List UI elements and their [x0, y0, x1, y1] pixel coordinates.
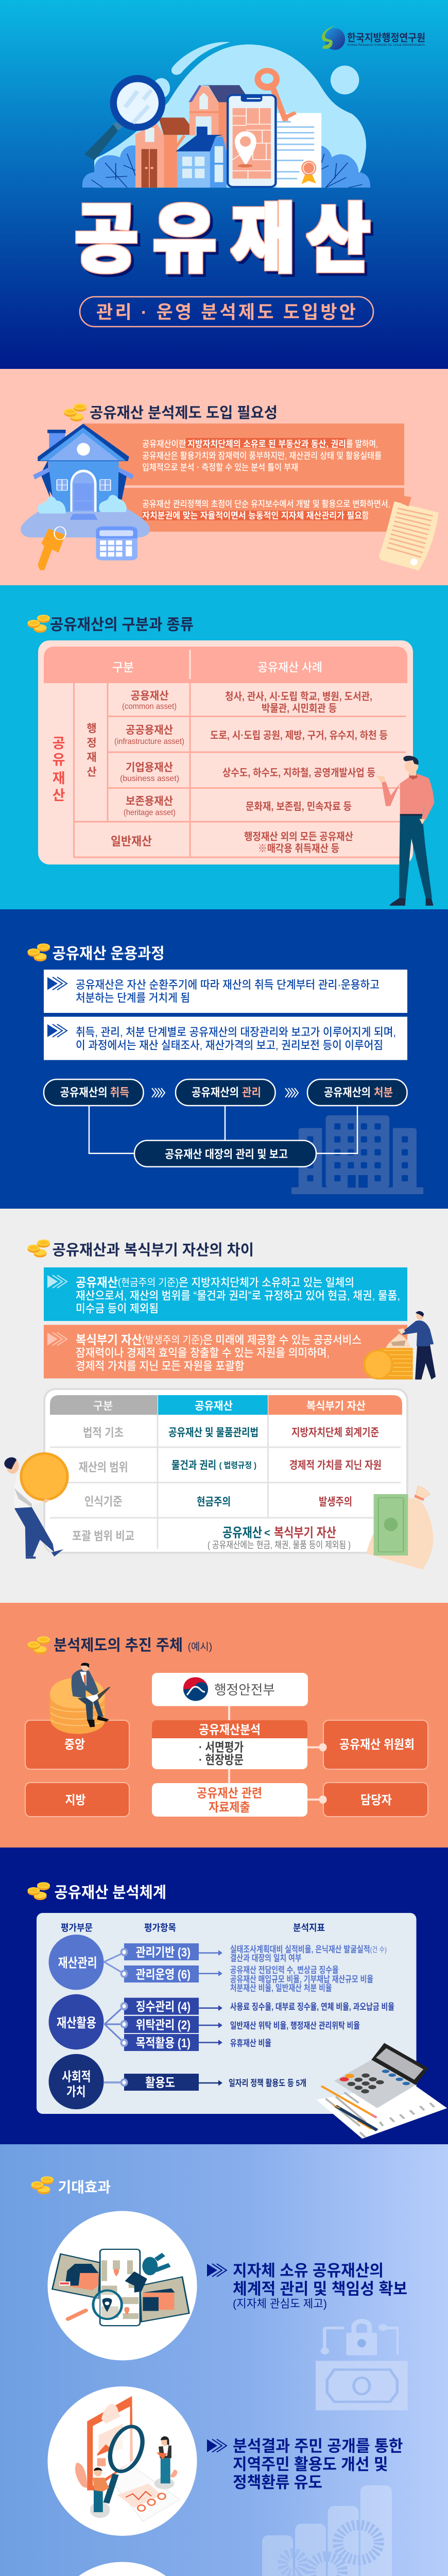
- illustration: money sack and cash: [366, 1486, 434, 1570]
- category circles: 사회적: [62, 2070, 91, 2084]
- box: ministry: 행정안전부: [214, 1682, 275, 1698]
- row examples: [210, 690, 388, 854]
- table header: [93, 1400, 366, 1412]
- evaluation item boxes: 목적활용 (1): [136, 2036, 191, 2050]
- circle: analysis report illustration: [47, 2386, 197, 2536]
- column: double-entry: 발생주의: [319, 1496, 352, 1508]
- text: effect 2: [207, 2437, 403, 2492]
- text panel 1: 를 말하며,: [346, 439, 378, 449]
- row examples: 문화재, 보존림, 민속자료 등: [246, 801, 352, 812]
- step: disposal: 처분: [374, 1086, 393, 1099]
- step: disposal: [307, 1079, 407, 1106]
- vertical label: public property: [53, 736, 65, 803]
- analysis indicators: 공유재산 전담인력 수, 변상금 징수율: [230, 1965, 339, 1975]
- text panel 2: [83, 488, 404, 532]
- column: double-entry: 지방자치단체 회계기준: [291, 1427, 379, 1438]
- title: 공유재산: [74, 177, 371, 287]
- analysis indicators: 공유재산 매입규모 비율, 기부채납 재산규모 비율: [230, 1974, 373, 1985]
- blue definition box: 재산으로서, 재산의 범위를 “물건과 권리”로 규정하고 있어 현금, 채권, 물품,: [76, 1289, 400, 1302]
- comparison summary: [208, 1526, 351, 1550]
- column: category: 포괄 범위 비교: [72, 1529, 134, 1543]
- icon: taegeuk: [183, 1677, 208, 1701]
- row labels: 기업용재산: [126, 761, 173, 774]
- panel: actors of the analysis system: [0, 1603, 448, 1848]
- column headers: 분석지표: [293, 1923, 325, 1933]
- analysis indicators: 사용료 징수율, 대부료 징수율, 연체 비율, 과오납금 비율: [230, 2002, 394, 2012]
- row labels: 일반재산: [111, 835, 152, 848]
- circle: expert team illustration: [47, 2562, 197, 2576]
- row labels: 공공용재산: [126, 724, 173, 736]
- analysis indicators: 처분재산 비율, 일반재산 처분 비율: [230, 1984, 332, 1993]
- box: central: [25, 1720, 129, 1769]
- comparison summary: <: [264, 1528, 270, 1539]
- table header: [112, 660, 322, 674]
- analysis indicators: 일반재산 위탁 비율, 행정재산 관리위탁 비율: [230, 2021, 360, 2031]
- row examples: 박물관, 시민회관 등: [262, 703, 337, 714]
- logo: institute: Korea Research Institute for Local Administration: [348, 43, 425, 47]
- box: data submission: 공유재산 관련: [197, 1787, 262, 1800]
- column: category: [72, 1426, 134, 1543]
- illustration: houses, phone map, key and document: [82, 42, 370, 188]
- row labels: 보존용재산: [126, 795, 173, 807]
- heading: (예시): [188, 1641, 212, 1653]
- category circles: 재산관리: [58, 1956, 97, 1970]
- text: effect 2: 지역주민 활용도 개선 및: [233, 2455, 388, 2473]
- text box 2: [44, 1017, 407, 1060]
- vertical label: administrative property: [87, 723, 97, 778]
- box: data submission: [152, 1783, 307, 1817]
- heading: 공유재산 운용과정: [53, 945, 165, 962]
- analysis indicators: (건 수): [370, 1945, 387, 1954]
- panel: hero cover: [0, 0, 448, 369]
- text panel 1: 공유재산은 활용가치와 잠재력이 풍부하지만, 재산관리 상태 및 활용실태를: [142, 451, 382, 461]
- orange definition box: 복식부기 자산: [76, 1333, 142, 1347]
- step: management: [176, 1079, 275, 1106]
- illustration: faded buildings: [291, 1115, 423, 1194]
- table header: 구분: [93, 1400, 113, 1412]
- step: management: 공유재산의: [192, 1086, 239, 1099]
- row examples: 상수도, 하수도, 지하철, 공영개발사업 등: [222, 767, 375, 779]
- vertical label: public property: 산: [53, 788, 65, 803]
- column: public property: 물건과 권리: [171, 1460, 216, 1471]
- analysis indicators: 결산과 대장의 일치 여부: [230, 1954, 302, 1963]
- heading: 공유재산과 복식부기 자산의 차이: [53, 1242, 254, 1259]
- category circles: [48, 1935, 104, 2109]
- illustration: man with coins and sack: [363, 1311, 436, 1380]
- vertical label: administrative property: 정: [87, 737, 97, 749]
- vertical label: public property: 재: [53, 771, 65, 786]
- blue definition box: 미수금 등이 제외됨: [76, 1302, 159, 1315]
- heading: 공유재산 분석체계: [55, 1885, 166, 1901]
- orange definition box: [44, 1325, 407, 1379]
- box: data submission: 자료제출: [209, 1801, 250, 1815]
- box: property analysis: · 서면평가: [199, 1740, 244, 1755]
- text panel 1: [83, 423, 404, 485]
- column: double-entry: [289, 1427, 382, 1508]
- analysis indicators: [229, 1944, 394, 2088]
- heading: 공유재산의 구분과 종류: [50, 616, 194, 634]
- table header: 공유재산: [195, 1400, 233, 1412]
- text panel 2: 함: [362, 511, 369, 520]
- box: property analysis: [152, 1720, 307, 1769]
- text: effect 2: 분석결과 주민 공개를 통한: [233, 2437, 403, 2455]
- illustration: paper scroll: [379, 496, 439, 570]
- connectors: [104, 1953, 124, 2082]
- box: ministry: [152, 1673, 308, 1706]
- ledger management pill: [134, 1141, 316, 1167]
- heading: [31, 2176, 111, 2195]
- box: committee: [323, 1720, 428, 1769]
- table header: 공유재산 사례: [257, 660, 322, 674]
- box: property analysis: · 현장방문: [199, 1753, 244, 1767]
- evaluation item boxes: 활용도: [145, 2076, 175, 2090]
- vertical label: public property: 공: [53, 736, 65, 751]
- heading: 분석제도의 추진 주체: [54, 1637, 183, 1654]
- analysis indicators: 일자리 정책 활용도 등 5개: [229, 2078, 306, 2088]
- text panel 2: 공유재산 관리정책의 초점이 단순 유지보수에서 개발 및 활용으로 변화하면서,: [142, 499, 390, 509]
- text box 1: [44, 970, 407, 1013]
- text: effect 1: 체계적 관리 및 책임성 확보: [233, 2280, 407, 2298]
- text: effect 2: 정책환류 유도: [233, 2473, 322, 2492]
- category circles: 가치: [66, 2084, 85, 2099]
- step: acquisition: [44, 1079, 143, 1106]
- column: category: 재산의 범위: [79, 1460, 128, 1473]
- box: staff: 담당자: [360, 1793, 392, 1807]
- illustration: man carrying a coin: [4, 1452, 69, 1558]
- arrow: [152, 1088, 165, 1097]
- arrows: [199, 1953, 221, 2083]
- heading: 기대효과: [58, 2179, 111, 2195]
- row labels: (infrastructure asset): [114, 737, 184, 746]
- text panel 1: 입체적으로 분석ㆍ측정할 수 있는 분석 틀이 부재: [142, 463, 298, 472]
- text panel 1: 지방자치단체의 소유로 된 부동산과 동산, 권리: [187, 439, 346, 449]
- panel: need for the analysis system: [0, 369, 448, 585]
- icon: faded lock and banknote: [316, 2319, 408, 2410]
- column: category: 법적 기초: [83, 1426, 124, 1439]
- box: local: 지방: [65, 1793, 85, 1807]
- step: disposal: 공유재산의: [324, 1086, 371, 1099]
- table header: 구분: [112, 660, 134, 674]
- icon: faded bar chart with gears: [262, 2485, 392, 2576]
- comparison table: [44, 1389, 407, 1553]
- step: management: 관리: [242, 1086, 261, 1099]
- row examples: ※매각용 취득재산 등: [258, 843, 339, 854]
- text box 2: 이 과정에서는 재산 실태조사, 재산가격의 보고, 권리보전 등이 이루어짐: [76, 1039, 383, 1052]
- text box 1: 처분하는 단계를 거치게 됨: [76, 991, 190, 1005]
- evaluation item boxes: 위탁관리 (2): [136, 2019, 191, 2032]
- subtitle pill: [80, 297, 373, 327]
- connector dots: [122, 1949, 127, 2086]
- arrow: [285, 1088, 298, 1097]
- row examples: 행정재산 외의 모든 공유재산: [244, 831, 353, 843]
- illustration: man on coin stack: [50, 1662, 111, 1734]
- column: public property: 현금주의: [197, 1496, 231, 1508]
- row labels: (business asset): [120, 774, 179, 783]
- step: acquisition: 공유재산의: [60, 1086, 107, 1099]
- heading: [28, 1882, 166, 1901]
- blue definition box: [44, 1267, 407, 1321]
- comparison summary: ( 공유재산에는 현금, 채권, 물품 등이 제외됨 ): [208, 1540, 351, 1550]
- text box 2: 취득, 관리, 처분 단계별로 공유재산의 대장관리와 보고가 이루어지게 되며,: [76, 1026, 396, 1039]
- logo: institute: [322, 26, 425, 50]
- vertical label: public property: 유: [53, 752, 65, 768]
- panel: public vs double-entry assets: [0, 1209, 448, 1603]
- column headers: 평가항목: [144, 1923, 176, 1933]
- column headers: 평가부문: [61, 1923, 93, 1933]
- blue definition box: 공유재산: [76, 1276, 118, 1290]
- heading: 공유재산 분석제도 도입 필요성: [90, 404, 278, 421]
- orange definition box: 은 미래에 제공할 수 있는 공공서비스: [203, 1333, 361, 1347]
- column: public property: 공유재산 및 물품관리법: [168, 1427, 259, 1438]
- text: effect 1: [207, 2262, 407, 2310]
- text: effect 1: 지자체 소유 공유재산의: [233, 2262, 384, 2280]
- orange definition box: (발생주의 기준): [142, 1334, 203, 1346]
- box: staff: [323, 1783, 428, 1817]
- blue definition box: 은 지방자치단체가 소유하고 있는 일체의: [179, 1276, 354, 1289]
- column: public property: ( 법령규정 ): [219, 1461, 256, 1470]
- box: committee: 공유재산 위원회: [339, 1738, 415, 1752]
- analysis indicators: 유휴재산 비율: [230, 2038, 271, 2048]
- vertical label: administrative property: 산: [87, 767, 97, 778]
- row labels: (common asset): [122, 702, 177, 711]
- orange definition box: 경제적 가치를 지닌 모든 자원을 포괄함: [76, 1360, 244, 1372]
- orange definition box: 잠재력이나 경제적 효익을 창출할 수 있는 자원을 의미하며,: [76, 1347, 330, 1359]
- box: central: 중앙: [64, 1738, 85, 1752]
- comparison summary: 공유재산: [222, 1526, 262, 1540]
- row labels: 공용재산: [131, 690, 169, 702]
- box: local: [25, 1783, 129, 1817]
- panel: classification of public property: [0, 585, 448, 909]
- panel: operating process: [0, 909, 448, 1209]
- text box 1: 공유재산은 자산 순환주기에 따라 재산의 취득 단계부터 관리·운용하고: [76, 978, 380, 991]
- table header: 복식부기 자산: [306, 1400, 366, 1412]
- evaluation item boxes: 관리기반 (3): [136, 1945, 191, 1960]
- box: property analysis: 공유재산분석: [199, 1723, 261, 1737]
- column: public property: [168, 1427, 259, 1508]
- row labels: (heritage asset): [124, 808, 176, 817]
- subtitle pill: 관리 · 운영 분석제도 도입방안: [96, 302, 356, 323]
- connectors: [228, 1706, 323, 1801]
- column: double-entry: 경제적 가치를 지닌 자원: [289, 1460, 382, 1471]
- category circles: 재산활용: [57, 2016, 96, 2030]
- column: category: 인식기준: [84, 1495, 123, 1508]
- evaluation item boxes: 관리운영 (6): [136, 1968, 191, 1981]
- row examples: 도로, 시·도립 공원, 제방, 구거, 유수지, 하천 등: [210, 730, 388, 741]
- row examples: 청사, 관사, 시·도립 학교, 병원, 도서관,: [225, 690, 372, 703]
- vertical label: administrative property: 행: [87, 723, 97, 735]
- vertical label: administrative property: 재: [87, 752, 97, 764]
- circle: asset search illustration: [47, 2211, 197, 2361]
- text: effect 1: (지자체 관심도 제고): [233, 2297, 327, 2310]
- row labels: [111, 690, 184, 848]
- evaluation item boxes: [124, 1943, 199, 2091]
- classification table: [38, 640, 413, 865]
- analysis indicators: 실태조사계획대비 실적비율, 은닉재산 발굴실적: [230, 1944, 370, 1955]
- illustration: calculator, pencil and paper: [316, 2043, 447, 2139]
- illustration: man presenting: [376, 756, 434, 906]
- comparison summary: 복식부기 자산: [274, 1526, 336, 1540]
- illustration: blue house, key and calculator: [21, 423, 150, 570]
- evaluation item boxes: 징수관리 (4): [136, 2000, 191, 2014]
- text panel 1: 공유재산이란: [142, 439, 186, 449]
- blue definition box: (현금주의 기준): [118, 1277, 179, 1289]
- text panel 2: 자치분권에 맞는 자율적이면서 능동적인 지자체 재산관리가 필요: [142, 511, 362, 520]
- step: acquisition: 취득: [110, 1086, 129, 1099]
- process flow: [44, 1079, 407, 1167]
- panel: analysis framework: [0, 1848, 448, 2144]
- logo: institute: 한국지방행정연구원: [347, 32, 425, 44]
- ledger management pill: 공유재산 대장의 관리 및 보고: [165, 1148, 288, 1161]
- panel: expected effects: [0, 2144, 448, 2576]
- framework card: [37, 1913, 416, 2114]
- connector dots: [319, 1743, 326, 1804]
- column headers: [61, 1923, 325, 1933]
